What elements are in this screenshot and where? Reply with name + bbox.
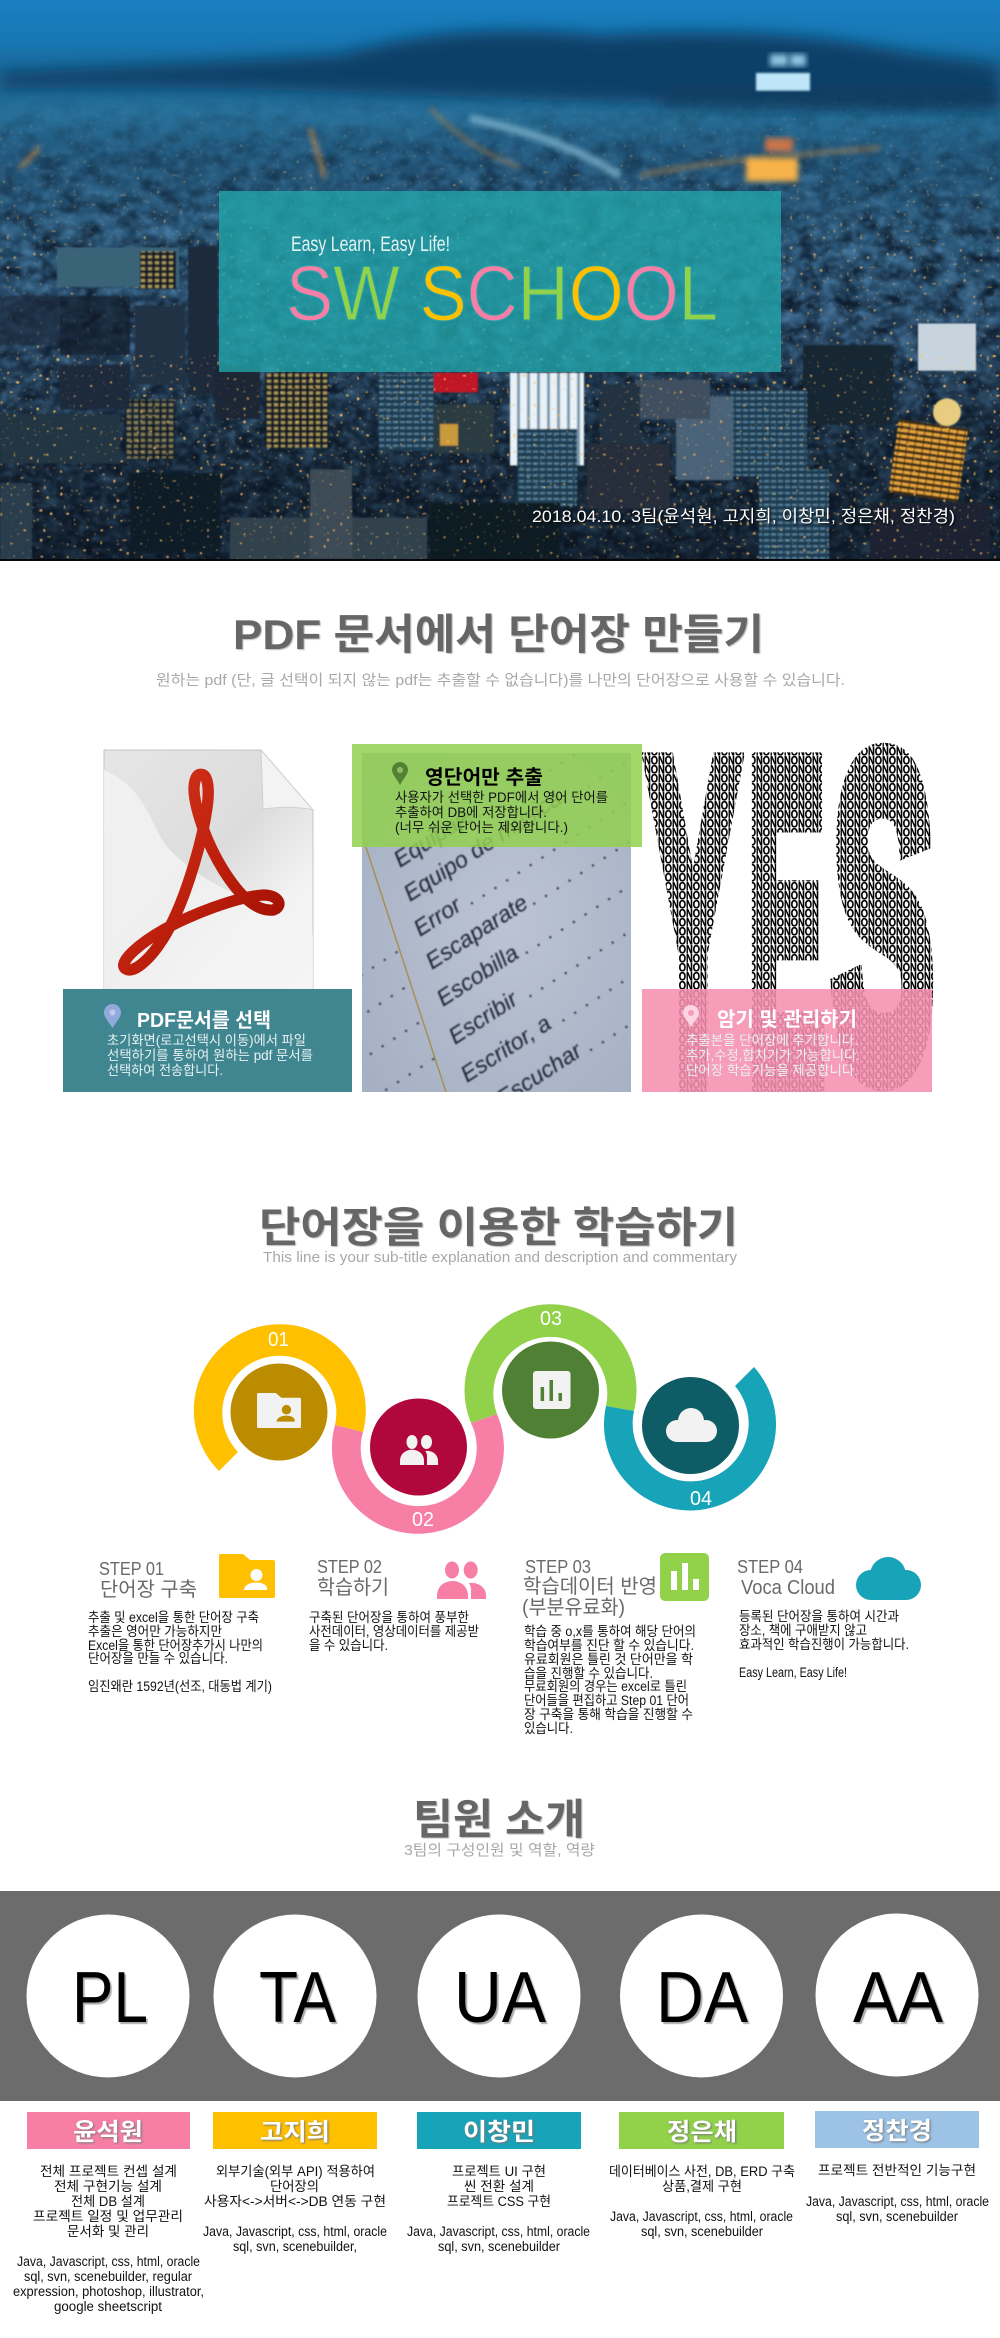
panel: step 03 text: (부분유료화) [522,1596,625,1619]
member description: google sheetscript [54,2299,162,2314]
heading: learning section: 단어장을 이용한 학습하기 [259,1204,738,1251]
step 03 body: 단어들을 편집하고 Step 01 단어 [524,1693,689,1708]
photo row: Escobilla [368,882,631,1056]
step 04 ring: 04 [690,1488,712,1510]
step 02 ring [332,1398,504,1534]
step 03 body: 유료회원은 틀린 것 단어만을 학 [524,1652,693,1667]
heading: PDF section: PDF 문서에서 단어장 만들기 [233,611,764,658]
panel: step 01 text: STEP 01 [99,1559,164,1579]
panel: step 04 text: Voca Cloud [741,1577,835,1599]
panel: grey role band [0,1891,1000,2101]
step 03 body: 학습 중 o,x를 통하여 해당 단어의 [524,1624,696,1639]
member description: sql, svn, scenebuilder, regular [24,2269,192,2284]
role circle DA [620,1914,783,2078]
panel: step card memorise and manage [642,989,932,1092]
member description: sql, svn, scenebuilder [836,2209,958,2224]
card body: (너무 쉬운 단어는 제외합니다.) [395,820,568,835]
member description [609,2164,795,2239]
step 01 ring: 01 [268,1329,289,1351]
photo row: Equipaje: Equipaje [389,802,478,872]
panel: step 01 text [88,1554,275,1694]
icon: people [400,1435,438,1465]
step 02 body: 사전데이터, 영상데이터를 제공받 [309,1624,479,1639]
card body: 선택하여 전송합니다. [107,1063,223,1078]
photo row: char: Escuchar [492,1036,587,1111]
photo row: Escaparate: Escaparate [421,889,532,974]
step 01 body: 추출 및 excel을 통한 단어장 구축 [88,1610,259,1625]
sub-heading: learning section: This line is your sub-title explanation and description and commentary [263,1249,738,1266]
panel: member 고지희: 고지희 [260,2119,330,2146]
role circle PL: PL [72,1958,148,2038]
member description: 상품,결제 구현 [662,2179,742,2194]
member description: 프로젝트 전반적인 기능구현 [818,2163,976,2178]
tagline: Easy Learn, Easy Life! [291,233,450,256]
panel: member 정찬경: 정찬경 [862,2118,932,2145]
panel: step 04 text [737,1557,921,1680]
panel: member 정찬경 [806,2111,989,2224]
panel: step 02 text: STEP 02 [317,1557,382,1577]
panel: step card PDF select [63,989,352,1092]
step 01 body: 단어장을 만들 수 있습니다. [88,1651,228,1666]
heading: team section: 팀원 소개 [413,1796,585,1843]
icon: acrobat swoosh [124,774,279,970]
panel: member 윤석원 [13,2112,204,2314]
photo row: Equipo de musica [404,762,625,902]
member description: 문서화 및 관리 [67,2224,149,2239]
panel: member 이창민 [407,2112,590,2254]
panel: step 04 text: STEP 04 [737,1557,803,1577]
member description [13,2164,204,2314]
chart: four step ribbon diagram [194,1304,776,1534]
card body [686,1033,860,1078]
hero bottom edge [0,559,1000,561]
member description: expression, photoshop, illustrator, [13,2284,204,2299]
role circle DA: DA [656,1958,748,2038]
icon: cloud [666,1408,717,1442]
step 04 body: Easy Learn, Easy Life! [739,1665,847,1680]
panel: dictionary photo [362,753,631,1092]
step 02 body: 을 수 있습니다. [309,1638,388,1653]
panel: step 02 text [309,1557,486,1653]
member description: 외부기술(외부 API) 적용하여 [216,2164,375,2179]
card body: 추가,수정,합치기가 가능합니다. [686,1048,860,1063]
card body: 사용자가 선택한 PDF에서 영어 단어를 [395,790,608,805]
photo row: Error: Error [409,891,467,941]
step 04 body: 장소, 책에 구애받지 않고 [739,1623,867,1638]
step 04 body: 등록된 단어장을 통하여 시간과 [739,1609,899,1624]
photo row: Escaparate [366,842,630,1014]
photo row: Equipaje [394,754,574,868]
panel: member 정은채: 정은채 [667,2119,737,2146]
step 01 body [88,1610,272,1694]
icon: folder with person [257,1393,301,1428]
step 03 body: 무료회원의 경우는 excel로 틀린 [524,1679,687,1694]
step 03 body: 습을 진행할 수 있습니다. [524,1666,653,1681]
date and team credit: 2018.04.10. 3팀(윤석원, 고지희, 이창민, 정은채, 정찬경) [532,507,955,526]
card body: 단어장 학습기능을 제공합니다. [686,1063,858,1078]
step 01 body: 임진왜란 1592년(선조, 대동법 계기) [88,1679,272,1694]
member description: 전체 프로젝트 컨셉 설계 [40,2164,177,2179]
step 01 ring [194,1324,366,1471]
card title: 영단어만 추출 [425,766,543,789]
step 01 body: Excel을 통한 단어장추가시 나만의 [88,1638,263,1653]
member description: 프로젝트 CSS 구현 [447,2194,551,2209]
step 03 body: 학습여부를 진단 할 수 있습니다. [524,1638,694,1653]
card body [107,1033,313,1078]
card title: PDF문서를 선택 [137,1009,271,1032]
member description: 사용자<->서버<->DB 연동 구현 [204,2194,386,2209]
photo row: Escritor, a [460,980,624,1084]
step 02 body: 구축된 단어장을 통하여 풍부한 [309,1610,469,1625]
step 03 ring: 03 [540,1308,562,1330]
role circle TA: TA [259,1958,336,2038]
panel: step 03 text: 학습데이터 반영 [523,1575,657,1598]
member description: sql, svn, scenebuilder, [233,2239,357,2254]
member description: Java, Javascript, css, html, oracle [17,2254,200,2269]
member description: sql, svn, scenebuilder [641,2224,763,2239]
step 04 body [739,1609,909,1680]
panel: step 03 text [522,1553,709,1736]
member description: 데이터베이스 사전, DB, ERD 구축 [609,2164,795,2179]
panel: member 고지희 [203,2112,387,2254]
panel: member 이창민: 이창민 [463,2119,535,2146]
panel: teal title box [219,191,781,372]
photo row: char [496,1024,628,1092]
icon: bar chart [533,1371,570,1409]
member description: 씬 전환 설계 [464,2179,534,2194]
photo row: Escribir: Escribir [444,985,523,1049]
step 03 body: 있습니다. [524,1721,573,1736]
step 03 ring [465,1304,637,1438]
photo row: Escritor, a: Escritor, a [456,1010,555,1087]
member description: 프로젝트 UI 구현 [452,2164,546,2179]
member description: 전체 구현기능 설계 [54,2179,162,2194]
sub-heading: PDF section: 원하는 pdf (단, 글 선택이 되지 않는 pdf는 추출할 수 없습니다)를 나만의 단어장으로 사용할 수 있습니다. [156,672,845,689]
panel: YES typographic image: Y [647,671,739,1173]
icon: teal cloud [856,1557,921,1600]
member description [203,2164,387,2254]
icon: map pin green [392,762,408,785]
step 02 body [309,1610,479,1653]
icon: map pin pink [683,1005,699,1027]
photo row: Escribir [384,933,626,1092]
card body: 초기화면(로고선택시 이동)에서 파일 [107,1033,306,1048]
step 03 body: 장 구축을 통해 학습을 진행할 수 [524,1707,693,1722]
icon: pink people [437,1562,486,1599]
role circle UA: UA [454,1958,546,2038]
member description: 프로젝트 일정 및 업무관리 [33,2209,183,2224]
card body: 추출본을 단어장에 추가합니다. [686,1033,858,1048]
icon: yellow folder [219,1554,275,1598]
member description: 전체 DB 설계 [71,2194,145,2209]
title: SW SCHOOL: SW SCHOOL [286,249,718,337]
member description [806,2163,989,2224]
icon: map pin blue [104,1004,121,1028]
panel: step 03 text: STEP 03 [525,1557,591,1577]
role circle AA: AA [853,1958,943,2038]
member description: Java, Javascript, css, html, oracle [203,2224,387,2239]
panel: member 윤석원: 윤석원 [73,2119,143,2146]
panel: PDF document icon [104,750,313,989]
member description: sql, svn, scenebuilder [438,2239,560,2254]
sub-heading: team section: 3팀의 구성인원 및 역할, 역량 [404,1842,595,1859]
member description: Java, Javascript, css, html, oracle [407,2224,590,2239]
member description: 단어장의 [270,2179,319,2194]
step 02 ring: 02 [412,1509,434,1531]
panel: step 02 text: 학습하기 [317,1576,389,1599]
step 04 body: 효과적인 학습진행이 가능합니다. [739,1637,909,1652]
photo row: Escobilla: Escobilla [432,939,523,1011]
role circle AA [816,1914,978,2076]
card body: 선택하기를 통하여 원하는 pdf 문서를 [107,1048,313,1063]
panel: hero city photo banner [0,0,1000,562]
card body: 추출하여 DB에 저장합니다. [395,805,547,820]
member description: Java, Javascript, css, html, oracle [610,2209,793,2224]
panel: step 01 text: 단어장 구축 [100,1578,197,1601]
icon: green chart [660,1553,709,1601]
panel: member 정은채 [609,2112,795,2239]
role circle TA [214,1914,376,2078]
photo row: Error [362,803,626,977]
step 01 body: 추출은 영어만 가능하지만 [88,1624,222,1639]
role circle PL [26,1914,190,2078]
panel: step card extract English words [352,744,642,847]
step 03 body [524,1624,696,1736]
card title: 암기 및 관리하기 [717,1008,857,1031]
card body [395,790,608,835]
photo row: Equipo de musica: Equipo de música [399,785,566,906]
step 04 ring [604,1367,776,1510]
role circle UA [418,1914,580,2078]
member description [407,2164,590,2254]
